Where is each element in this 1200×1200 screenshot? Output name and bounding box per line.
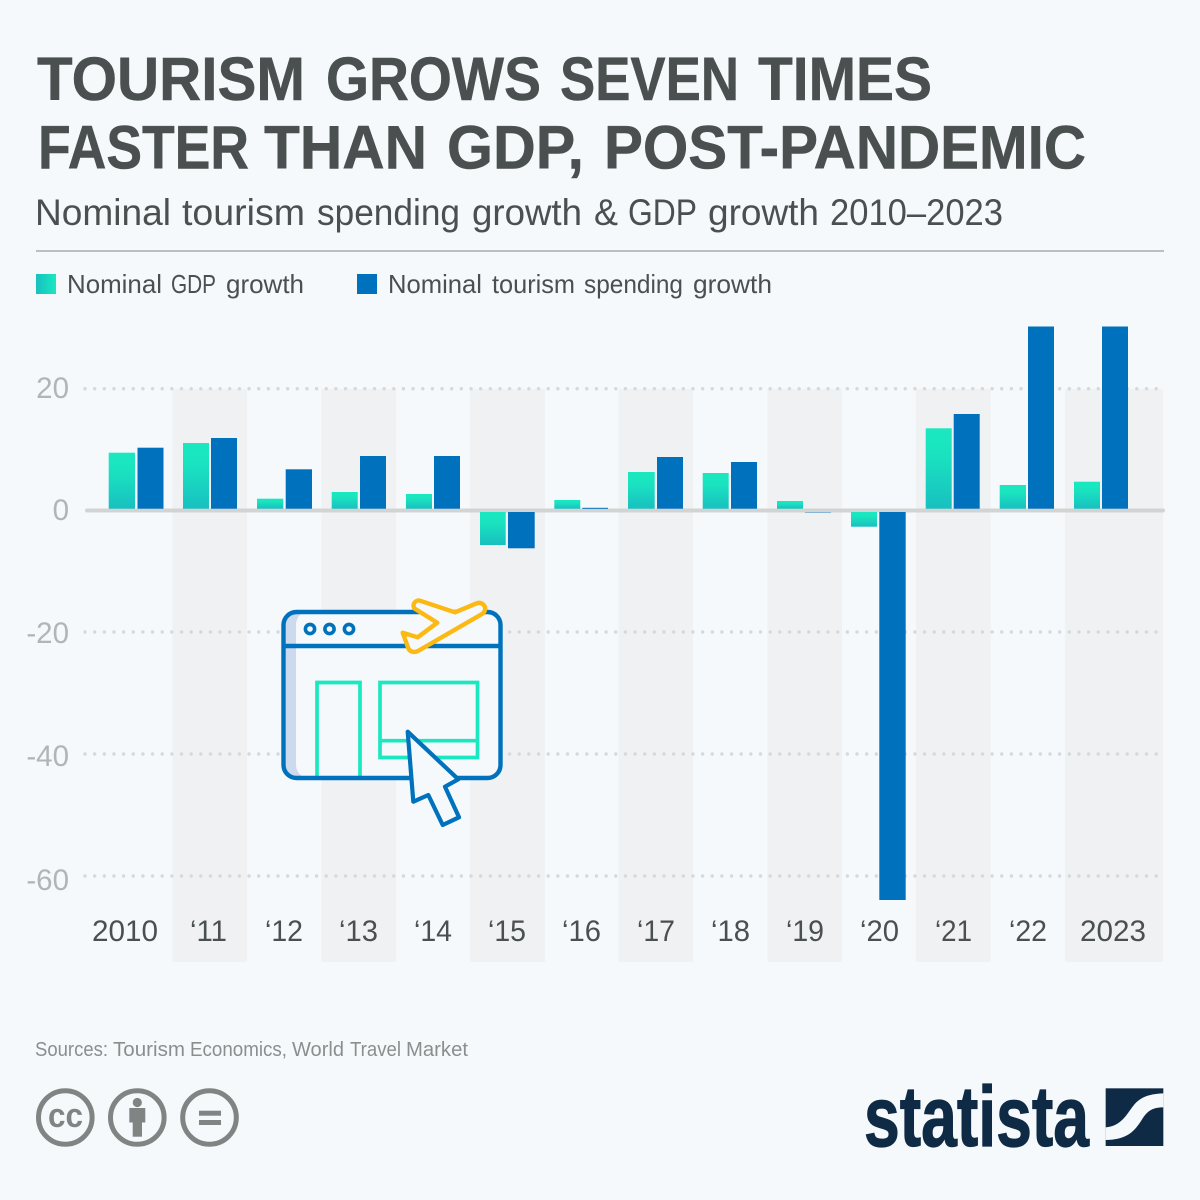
legend: tourism spending growth: spending <box>584 269 683 299</box>
legend: GDP growth: growth <box>226 269 304 299</box>
x axis labels: 2023 <box>1080 915 1146 948</box>
bar chart <box>26 326 1165 962</box>
subtitle: & <box>594 192 618 233</box>
x axis labels: ‘14 <box>414 915 452 948</box>
x axis labels: ‘12 <box>265 915 303 948</box>
title: SEVEN <box>560 45 739 113</box>
x axis labels: ‘16 <box>562 915 601 948</box>
x axis labels: ‘18 <box>711 915 750 948</box>
y axis labels: -20 <box>26 617 69 650</box>
subtitle: tourism <box>182 192 305 233</box>
x axis labels: ‘17 <box>637 915 675 948</box>
statista logo: statista <box>864 1070 1090 1165</box>
source: Sources: <box>35 1039 108 1061</box>
icon: creative commons: cc <box>48 1097 83 1135</box>
icon: browser window with plane and cursor <box>284 601 500 825</box>
legend: GDP growth <box>36 269 304 299</box>
title: THAN <box>264 114 427 182</box>
source: Economics, <box>190 1039 287 1061</box>
title <box>37 45 1086 182</box>
subtitle: growth <box>472 192 582 233</box>
legend: tourism spending growth: growth <box>693 269 772 299</box>
icon: attribution <box>110 1091 164 1144</box>
source: Travel <box>350 1039 401 1061</box>
icon: plane <box>403 601 485 652</box>
y axis labels: -60 <box>26 864 69 897</box>
x axis labels: ‘11 <box>190 915 227 948</box>
subtitle: spending <box>317 192 460 233</box>
icon: statista mark <box>1106 1088 1163 1146</box>
y axis labels <box>26 372 69 897</box>
subtitle <box>35 192 1003 233</box>
subtitle: Nominal <box>35 192 171 233</box>
legend: GDP growth: GDP <box>171 269 216 299</box>
subtitle: growth <box>708 192 819 233</box>
x axis labels: ‘20 <box>860 915 899 948</box>
legend: tourism spending growth: tourism <box>492 269 575 299</box>
x axis labels: ‘22 <box>1009 915 1047 948</box>
title: GROWS <box>326 45 541 113</box>
x axis labels: 2010 <box>92 915 158 948</box>
y axis labels: -40 <box>26 740 69 773</box>
title: TOURISM <box>37 45 305 113</box>
source: World <box>292 1039 344 1061</box>
subtitle: GDP <box>628 192 697 233</box>
legend: GDP growth: Nominal <box>67 269 162 299</box>
icon: no derivatives <box>183 1091 236 1144</box>
tourism spending bars <box>138 326 1128 900</box>
source: Market <box>406 1039 468 1061</box>
GDP growth bars <box>109 428 1100 545</box>
subtitle: 2010–2023 <box>830 192 1003 233</box>
legend: tourism spending growth: Nominal <box>388 269 482 299</box>
title: FASTER <box>38 114 249 182</box>
icon: creative commons <box>39 1091 92 1144</box>
legend <box>36 269 772 299</box>
x axis labels: ‘15 <box>488 915 526 948</box>
title: GDP, <box>447 114 584 182</box>
title: TIMES <box>758 45 932 113</box>
x axis labels <box>92 915 1146 948</box>
x axis labels: ‘19 <box>786 915 824 948</box>
source: Tourism <box>113 1039 185 1061</box>
x axis labels: ‘21 <box>935 915 972 948</box>
title: POST-PANDEMIC <box>604 114 1086 182</box>
icon: cursor <box>408 732 459 825</box>
y axis labels: 0 <box>53 494 69 527</box>
source <box>35 1039 468 1061</box>
legend: tourism spending growth <box>357 269 772 299</box>
x axis labels: ‘13 <box>339 915 378 948</box>
y axis labels: 20 <box>36 372 69 405</box>
